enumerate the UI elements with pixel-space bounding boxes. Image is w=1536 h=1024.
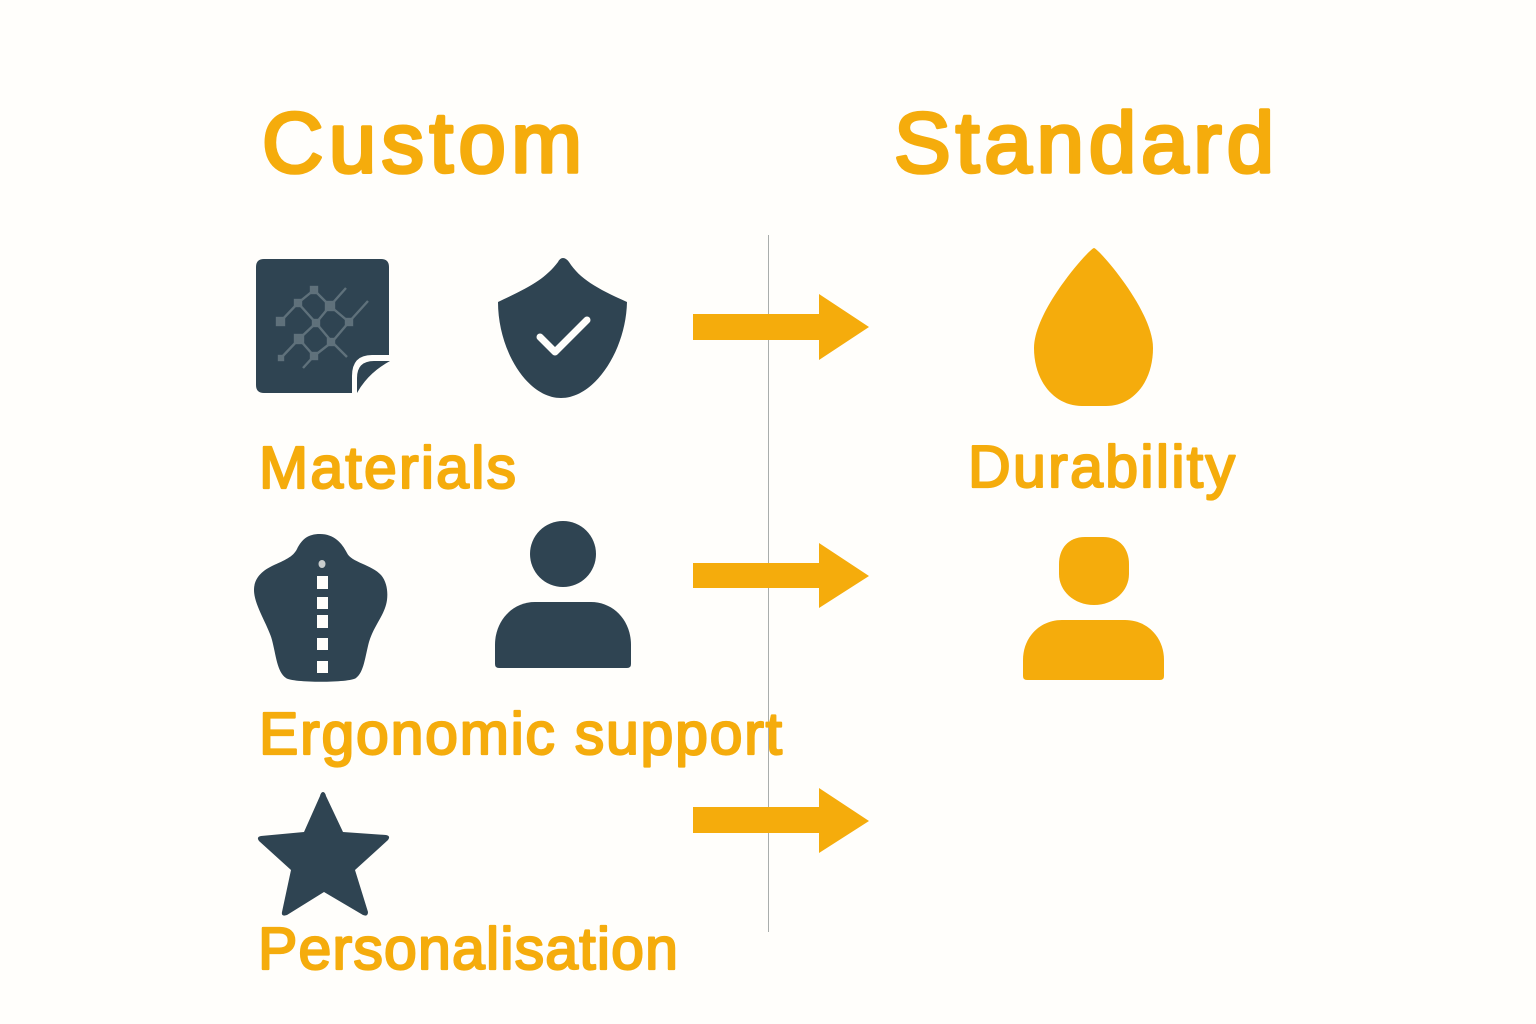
heading: Standard: Standard (894, 96, 1274, 191)
label: Personalisation: Personalisation (258, 916, 678, 982)
icon: star (258, 792, 389, 916)
label: Ergonomic support: Ergonomic support (259, 701, 782, 767)
icon: shield with check (498, 258, 627, 398)
icon: spine torso (254, 534, 387, 682)
label: Durability: Durability (968, 434, 1236, 500)
arrow: materials to durability (693, 294, 869, 360)
icon: water drop (1034, 248, 1153, 406)
center divider line (768, 235, 770, 932)
icon: person (standard) (1023, 537, 1164, 680)
label: Materials: Materials (259, 435, 516, 501)
icon: person (custom) (495, 521, 631, 668)
heading: Custom: Custom (262, 96, 582, 191)
arrow: personalisation (693, 788, 869, 853)
arrow: ergonomic support (693, 543, 869, 608)
icon: material swatch (256, 259, 390, 393)
